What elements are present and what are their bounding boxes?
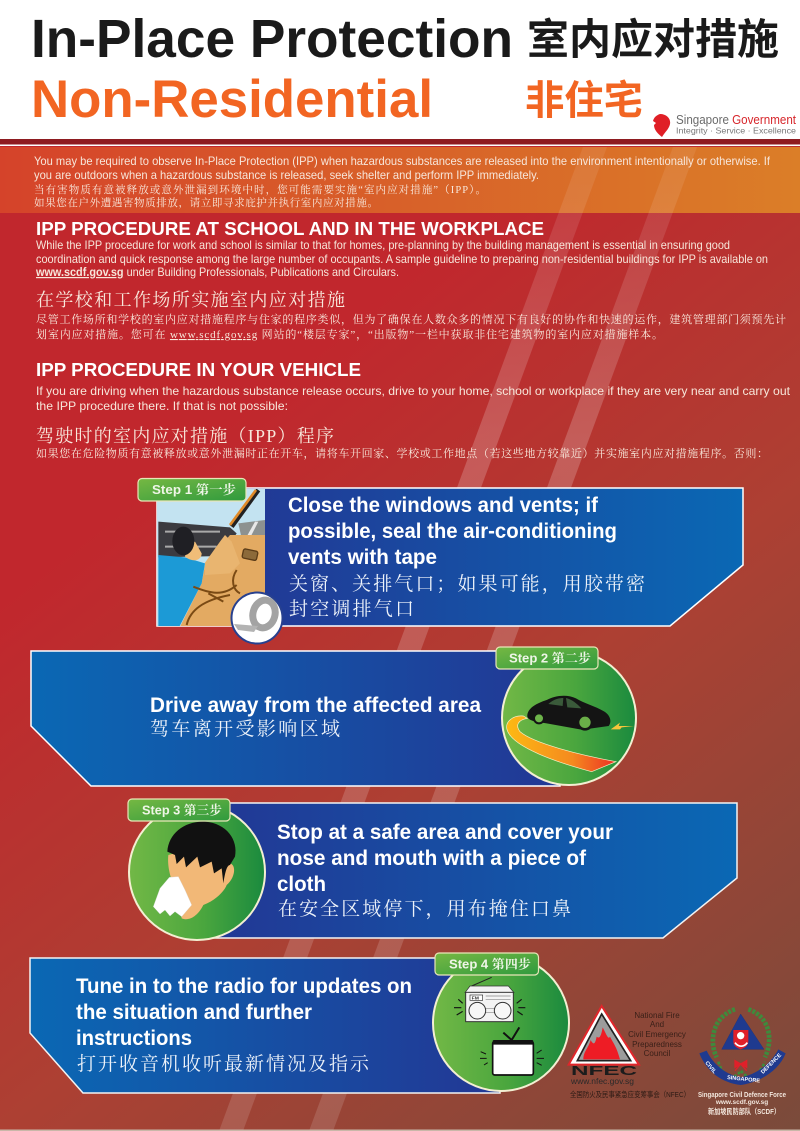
bottom edge line xyxy=(0,1130,800,1131)
body: vehicle: the IPP procedure there. If that is not possible: xyxy=(36,399,288,413)
step 4 text: Tune in to the radio for updates on xyxy=(76,975,412,998)
step 3 text: 在安全区域停下，用布掩住口鼻 xyxy=(278,898,571,920)
intro text xyxy=(34,154,771,209)
Chinese body: school and workplace: 划室内应对措施。您可在 www.scdf.gov.sg 网站的“楼层专家”，“出版物”一栏中获取非住宅建筑物的室内应对措施样本。 xyxy=(36,327,663,341)
step 1 panel shape xyxy=(157,488,743,626)
step 2 text: 驾车离开受影响区域 xyxy=(150,718,340,740)
SCDF website: www.scdf.gov.sg xyxy=(715,1099,768,1106)
NFEC full name xyxy=(628,1011,686,1058)
subtitle: Non-Residential: Non-Residential xyxy=(31,70,433,129)
step 3 text: nose and mouth with a piece of xyxy=(277,847,587,870)
title: In-Place Protection: In-Place Protection xyxy=(31,9,513,69)
panel: step 2 xyxy=(31,647,636,786)
step 1 text: Close the windows and vents; if xyxy=(288,494,599,517)
step 1 text: vents with tape xyxy=(288,546,437,569)
NFEC Chinese name: 全国防火及民事紧急应变筹事会（NFEC） xyxy=(570,1089,690,1099)
NFEC full name: Preparedness xyxy=(632,1040,682,1049)
body: vehicle xyxy=(36,384,791,413)
NFEC wordmark: NFEC xyxy=(571,1063,638,1078)
diagonal road stripes xyxy=(219,147,697,1131)
intro text: you are outdoors when a hazardous substance is released, seek shelter and perform IPP immediately. xyxy=(34,168,539,182)
step 3 badge: Step 3 第三步 xyxy=(142,802,222,818)
panel: step 4 xyxy=(30,953,569,1093)
crest ribbon: defence: DEFENCE xyxy=(760,1052,783,1075)
header bar xyxy=(0,139,800,144)
crest ribbon: civil: CIVIL xyxy=(703,1060,718,1076)
icon: SCDF crest xyxy=(699,1009,786,1085)
title: Chinese: 室内应对措施 xyxy=(527,16,779,63)
subtitle: Chinese: 非住宅 xyxy=(525,79,643,123)
step 3 text xyxy=(277,821,613,920)
step 3 panel shape xyxy=(197,803,737,938)
step 2 text: Drive away from the affected area xyxy=(150,694,481,717)
NFEC full name: Civil Emergency xyxy=(628,1030,686,1039)
step 1 text: 关窗、关排气口；如果可能，用胶带密 xyxy=(289,573,645,595)
step 1 text: possible, seal the air-conditioning xyxy=(288,520,617,543)
step 3 badge xyxy=(128,799,230,821)
step 1 badge: Step 1 第一步 xyxy=(152,482,237,497)
Singapore Government logo xyxy=(653,113,796,137)
step 4 text: 打开收音机收听最新情况及指示 xyxy=(77,1053,370,1075)
NFEC full name: Council xyxy=(644,1049,671,1058)
icon: radio and television: FM xyxy=(472,996,479,1002)
step 3 text: cloth xyxy=(277,873,326,896)
icon: person covering nose and mouth xyxy=(129,804,265,940)
step 4 text xyxy=(76,975,412,1075)
NFEC full name: National Fire xyxy=(634,1011,680,1020)
Chinese heading: vehicle: 驾驶时的室内应对措施（IPP）程序 xyxy=(36,426,334,446)
icon: car on road xyxy=(502,651,636,785)
step 3 text: Stop at a safe area and cover your xyxy=(277,821,613,844)
step 2 text xyxy=(150,694,481,740)
body: vehicle: If you are driving when the hazardous substance release occurs, drive to your home, school or workplace if they are very near and carry out xyxy=(36,384,791,398)
body: school and workplace: www.scdf.gov.sg under Building Professionals, Publications and Circulars. xyxy=(35,265,399,279)
step 1 text: 封空调排气口 xyxy=(289,598,414,620)
step 2 panel shape xyxy=(31,651,560,786)
step 4 text: instructions xyxy=(76,1027,192,1050)
step 2 badge xyxy=(496,647,598,669)
Chinese heading: school and workplace: 在学校和工作场所实施室内应对措施 xyxy=(36,290,345,310)
step 4 text: the situation and further xyxy=(76,1001,312,1024)
icon: radio and television xyxy=(433,955,569,1091)
Chinese body: vehicle: 如果您在危险物质有意被释放或意外泄漏时正在开车，请将车开回家、学校或工作地点（若这些地方较靠近）并实施室内应对措施程序。否则： xyxy=(36,446,768,460)
step 1 badge xyxy=(138,478,246,501)
panel: step 1 xyxy=(138,478,743,644)
body: school and workplace xyxy=(35,238,768,279)
Chinese body: school and workplace xyxy=(36,312,786,341)
SCDF name: Singapore Civil Defence Force xyxy=(698,1092,786,1099)
logo tagline: Integrity · Service · Excellence xyxy=(676,126,796,136)
step 4 panel shape xyxy=(30,958,500,1093)
intro text: 如果您在户外遭遇害物质排放，请立即寻求庇护并执行室内应对措施。 xyxy=(34,196,378,209)
NFEC website: www.nfec.gov.sg xyxy=(570,1076,634,1086)
SCDF Chinese name: 新加坡民防部队（SCDF） xyxy=(708,1106,780,1116)
body: school and workplace: While the IPP procedure for work and school is similar to that for homes, pre-planning by the building management is essential in ensuring good xyxy=(36,238,730,252)
logo: SCDF xyxy=(698,1009,786,1116)
intro band background xyxy=(0,147,800,213)
step 4 badge: Step 4 第四步 xyxy=(449,956,532,972)
illustration: person sealing car vents xyxy=(157,489,265,627)
logo wordmark: Singapore Government xyxy=(676,113,796,127)
step 1 text xyxy=(288,494,645,620)
panel: step 3 xyxy=(128,799,737,940)
icon: roll of tape xyxy=(232,592,282,644)
intro text: 当有害物质有意被释放或意外泄漏到环境中时，您可能需要实施“室内应对措施”（IPP）。 xyxy=(34,183,486,196)
icon: NFEC triangle with flame xyxy=(569,1006,639,1065)
icon: merlion xyxy=(653,114,670,137)
step 4 badge xyxy=(435,953,538,975)
Chinese body: school and workplace: 尽管工作场所和学校的室内应对措施程序与住家的程序类似，但为了确保在人数众多的情况下有良好的协作和快速的运作，建筑管理部门须预先计 xyxy=(36,312,786,326)
NFEC full name: And xyxy=(650,1020,664,1029)
heading: vehicle: IPP PROCEDURE IN YOUR VEHICLE xyxy=(36,360,361,380)
logo: NFEC xyxy=(569,1006,690,1099)
crest ribbon: Singapore: SINGAPORE xyxy=(727,1075,761,1084)
step 2 badge: Step 2 第二步 xyxy=(509,650,592,666)
heading: school and workplace: IPP PROCEDURE AT SCHOOL AND IN THE WORKPLACE xyxy=(36,219,544,239)
